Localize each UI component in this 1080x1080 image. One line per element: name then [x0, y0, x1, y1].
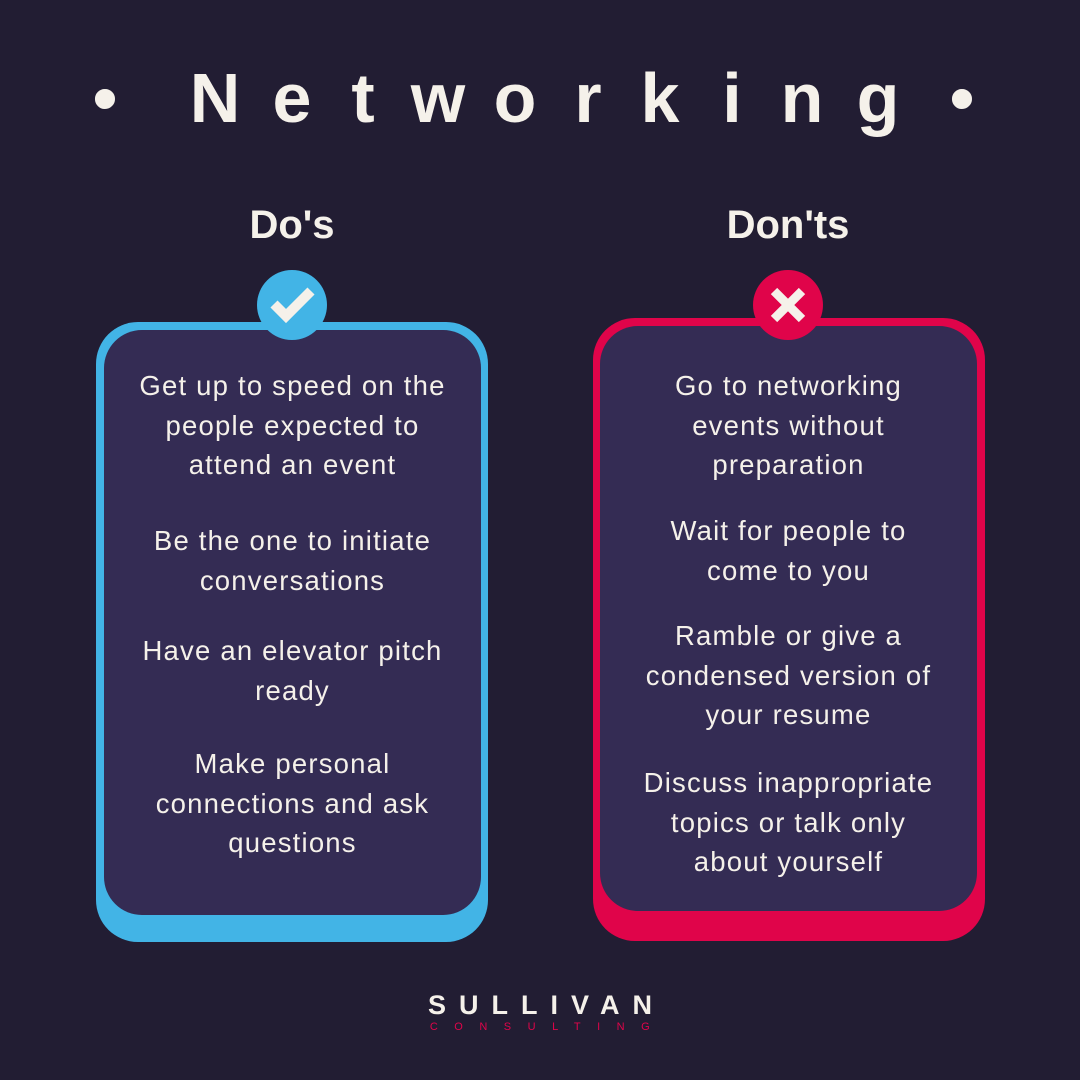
- item 3: Have an elevator pitch: [142, 635, 443, 666]
- heading: Do's: Do's: [249, 203, 335, 247]
- logo: SULLIVAN: [428, 990, 665, 1020]
- title: i: [722, 59, 742, 137]
- heading: Don'ts: Don'ts: [727, 203, 849, 247]
- logo: [428, 990, 666, 1033]
- inner panel: [104, 330, 481, 915]
- panel: do's: [96, 322, 488, 942]
- item 1: [139, 370, 446, 480]
- title: •: [950, 59, 974, 137]
- item 2: Wait for people to: [670, 515, 907, 546]
- title: [93, 59, 974, 137]
- item 1: [675, 370, 902, 480]
- panel: don'ts: [593, 318, 985, 941]
- item 3: ready: [255, 674, 330, 706]
- item 4: Make personal: [194, 748, 390, 779]
- item 4: [644, 767, 933, 877]
- icon: cross: [753, 270, 823, 340]
- item 4: connections and ask: [156, 788, 429, 818]
- item 3: [646, 620, 931, 730]
- title: o: [494, 59, 536, 137]
- item 4: questions: [228, 827, 357, 858]
- title: w: [411, 59, 465, 137]
- item 3: condensed version of: [646, 660, 931, 690]
- title: t: [351, 59, 375, 137]
- item 1: Get up to speed on the: [139, 370, 446, 401]
- logo: CONSULTING: [430, 1021, 666, 1033]
- item 2: [670, 515, 907, 586]
- item 4: about yourself: [694, 846, 883, 877]
- item 1: events without: [692, 410, 885, 440]
- icon: check: [257, 270, 327, 340]
- title: n: [781, 59, 823, 137]
- item 1: Go to networking: [675, 370, 902, 401]
- title: e: [273, 59, 311, 137]
- item 2: conversations: [200, 564, 385, 596]
- title: k: [641, 59, 679, 137]
- item 2: Be the one to initiate: [154, 525, 431, 556]
- item 3: Ramble or give a: [675, 620, 902, 651]
- item 2: come to you: [707, 554, 870, 586]
- title: •: [93, 59, 117, 137]
- item 1: attend an event: [189, 449, 396, 480]
- title: g: [857, 59, 899, 137]
- title: r: [574, 59, 602, 137]
- item 1: preparation: [712, 449, 865, 480]
- item 4: topics or talk only: [671, 806, 906, 838]
- item 4: [156, 748, 429, 858]
- item 1: people expected to: [165, 410, 420, 440]
- title: N: [190, 59, 240, 137]
- item 4: Discuss inappropriate: [644, 767, 933, 798]
- inner panel: [600, 326, 977, 911]
- item 2: [154, 525, 431, 596]
- item 3: your resume: [705, 699, 872, 730]
- item 3: [142, 635, 443, 706]
